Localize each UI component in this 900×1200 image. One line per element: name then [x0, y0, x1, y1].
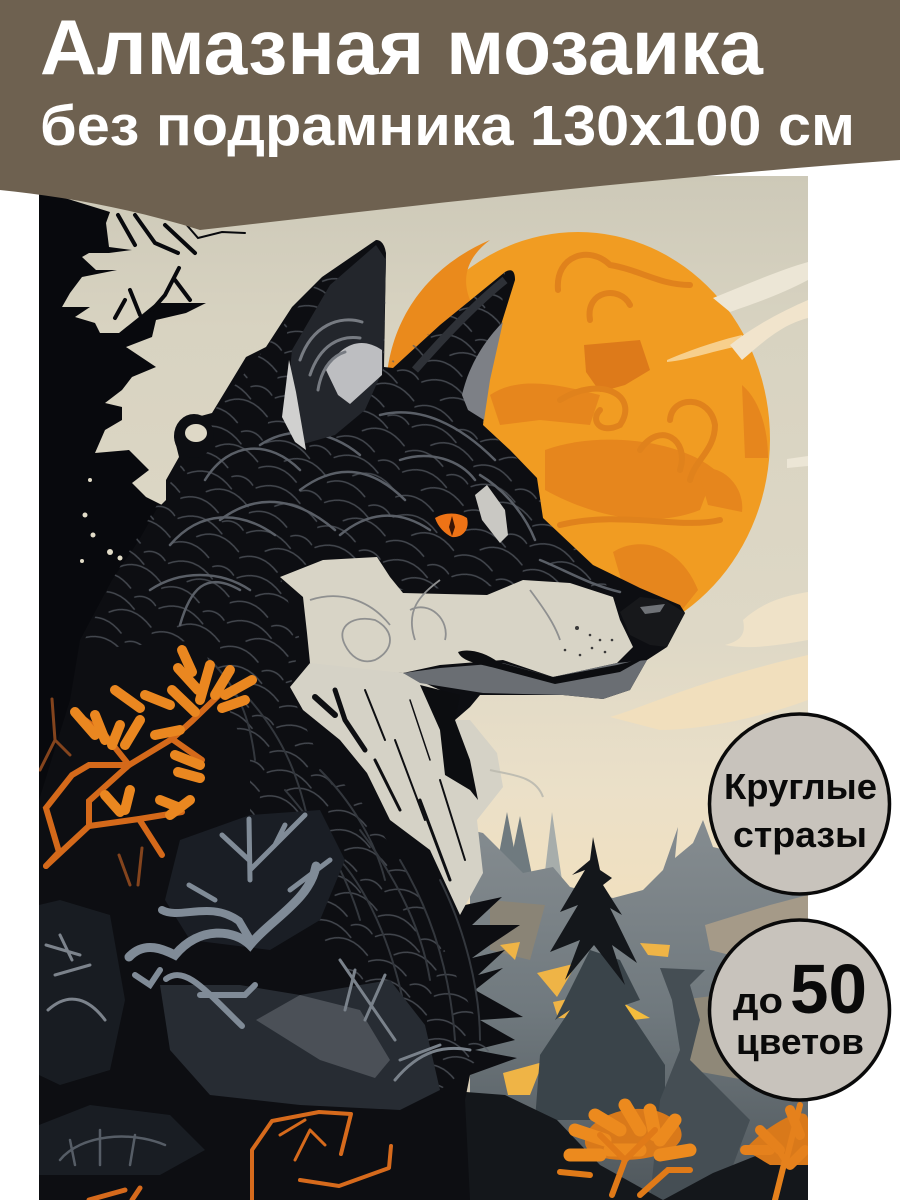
orange bush bottom centre — [560, 1105, 690, 1195]
right distant tree — [650, 968, 750, 1200]
cheek swirl lines — [310, 580, 560, 661]
knob in the fur — [174, 414, 212, 454]
dark pine tree — [550, 837, 637, 985]
mouth line — [458, 650, 645, 684]
orange eye — [435, 514, 468, 537]
wolf right ear — [415, 280, 505, 420]
badge: round rhinestones — [710, 714, 890, 894]
dark foreground ground right — [465, 1092, 808, 1200]
nose — [620, 597, 685, 647]
painting: wolf and orange moon — [39, 176, 808, 1200]
orange moon — [386, 232, 770, 646]
left tree silhouette — [39, 190, 245, 820]
gray coral foliage — [46, 815, 470, 1165]
badge: round rhinestones: Круглые — [724, 766, 877, 807]
wolf left ear — [282, 245, 386, 450]
sky background — [62, 176, 808, 1092]
chest fur stripes — [315, 690, 465, 880]
golden forest glow — [500, 942, 670, 1095]
white chest fur — [290, 663, 503, 915]
wolf body silhouette — [39, 240, 685, 1200]
distant pine trees — [500, 812, 562, 877]
lower jaw — [403, 660, 647, 699]
orange creature outline — [89, 1112, 391, 1200]
wolf fur texture — [80, 272, 610, 1090]
black neck strip — [420, 685, 478, 800]
lower wolf fur lines — [210, 660, 480, 1040]
brow marking — [475, 485, 508, 543]
white muzzle and cheek — [280, 557, 633, 677]
top banner — [0, 0, 900, 230]
bluish pine tree base — [535, 950, 665, 1120]
tan rock patches — [490, 895, 808, 1080]
subtitle: без подрамника 130х100 см — [40, 94, 855, 158]
title: Алмазная мозаика — [40, 3, 764, 91]
neck wisp — [490, 770, 543, 797]
orange bush bottom right — [745, 1105, 808, 1200]
badge: up to 50 colours: 50 — [790, 950, 867, 1028]
mountains — [470, 820, 808, 1200]
badge: up to 50 colours: цветов — [736, 1021, 864, 1062]
badge: up to 50 colours — [710, 920, 890, 1100]
wispy clouds — [610, 262, 808, 730]
badge: up to 50 colours: до — [733, 980, 783, 1021]
whisker dots — [564, 626, 613, 656]
dark rocks and undergrowth — [39, 810, 440, 1175]
wolf fur highlights — [150, 412, 620, 625]
badge: round rhinestones: стразы — [733, 814, 867, 855]
orange coral branches left — [40, 650, 252, 885]
